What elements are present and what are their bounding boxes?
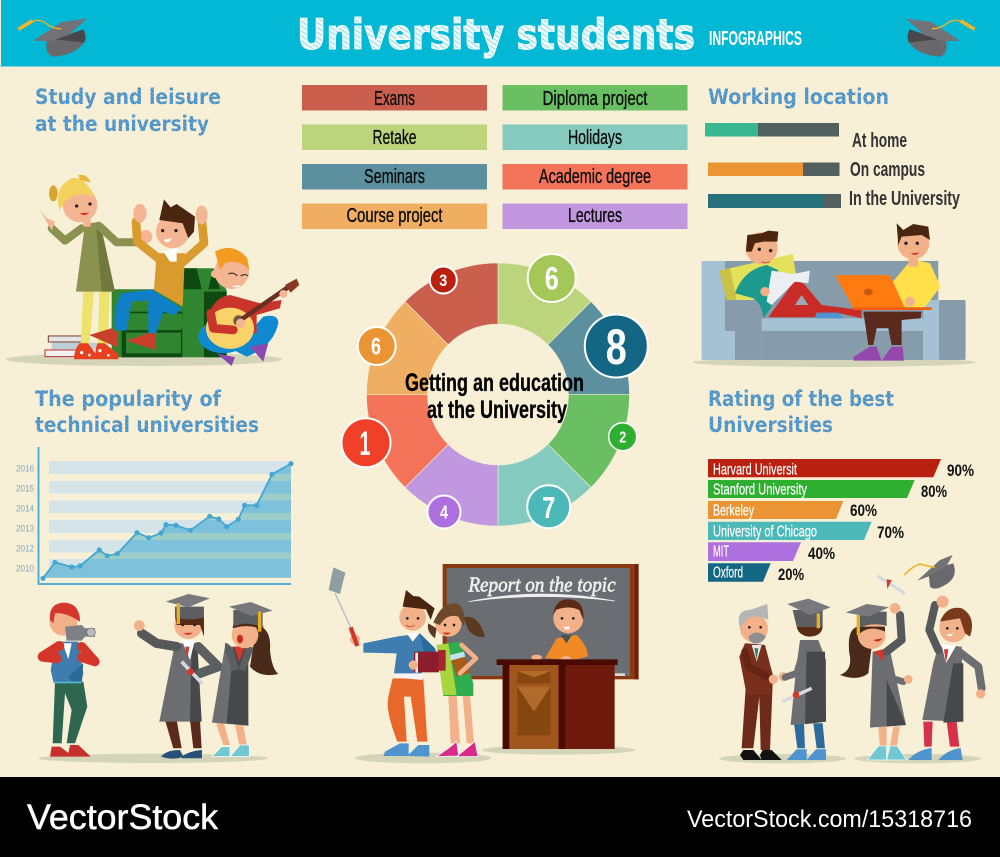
- heading: rating of the best universities: Rating of the best: [708, 387, 894, 411]
- legend item: Exams: Exams: [374, 88, 415, 110]
- student with laptop: [835, 223, 941, 361]
- line chart: popularity by year: 2014: [16, 504, 34, 514]
- photographer: [43, 603, 95, 757]
- line chart: popularity by year: 2013: [16, 524, 34, 534]
- badge 8: [585, 314, 648, 378]
- subtitle: INFOGRAPHICS: [709, 28, 802, 50]
- girl standing: [40, 175, 152, 359]
- legend item: Academic degree: Academic degree: [539, 166, 651, 188]
- badge 6 orange: [358, 327, 396, 365]
- heading: rating of the best universities: Universities: [708, 413, 833, 437]
- line chart: popularity by year: 2015: [16, 484, 34, 494]
- couch: [702, 261, 966, 360]
- legend item: Retake: Retake: [372, 127, 416, 149]
- boy taking selfie: [329, 567, 446, 757]
- bar chart: university ratings: 90%: [947, 461, 974, 480]
- badge 2: 2: [619, 430, 626, 446]
- bar chart: university ratings: Berkeley: [713, 502, 754, 520]
- blackboard: Report on the topic: [467, 573, 616, 597]
- legend item: Seminars: [302, 164, 487, 190]
- bar chart: university ratings: 70%: [877, 523, 904, 542]
- badge 4: 4: [440, 502, 448, 522]
- legend item: Seminars: Seminars: [364, 166, 425, 188]
- illustration: professor and graduates throwing caps: [719, 555, 985, 763]
- donut centre text: at the University: [427, 396, 567, 424]
- badge 6 orange: 6: [371, 334, 381, 360]
- graduate woman waving: [840, 603, 913, 760]
- heading: study and leisure: Study and leisure: [35, 85, 221, 109]
- heading: popularity of technical universities: technical universities: [35, 413, 259, 437]
- badge 2: [609, 423, 637, 451]
- heading: rating of the best universities: [708, 387, 894, 437]
- line chart: popularity by year: [16, 447, 294, 584]
- donut centre text: [405, 369, 584, 424]
- icon: flying cap: [904, 555, 955, 589]
- donut segments: [366, 263, 630, 526]
- legend item: Holidays: [502, 124, 688, 150]
- legend item: Lectures: Lectures: [568, 205, 622, 227]
- badge 6 green: 6: [545, 260, 559, 296]
- girl with books: [428, 603, 485, 757]
- legend item: Academic degree: [502, 164, 688, 190]
- badge 8: 8: [606, 319, 627, 375]
- donut chart: getting an education: [342, 254, 648, 528]
- legend item: Holidays: Holidays: [568, 127, 622, 149]
- chart: working location bars: On campus: [850, 159, 925, 181]
- heading: working location: Working location: [708, 85, 889, 109]
- illustration: photographer and two graduates: [38, 594, 278, 763]
- boy playing guitar: [198, 248, 299, 366]
- bar chart: university ratings: 20%: [778, 565, 804, 584]
- line chart: popularity by year: 2012: [16, 544, 34, 554]
- icon: right graduation cap: [906, 19, 975, 57]
- bar chart: university ratings: Harvard Universit: [713, 462, 797, 478]
- bar chart: university ratings: [708, 459, 974, 584]
- icon: flying diploma: [877, 576, 905, 593]
- legend: eight coloured labels: [302, 85, 688, 229]
- footer: watermark bar: VectorStock.com/15318716: [687, 806, 972, 833]
- sofa: [112, 268, 227, 357]
- bar chart: university ratings: MIT: [713, 544, 729, 560]
- bar chart: university ratings: 60%: [850, 501, 877, 520]
- legend item: Exams: [302, 85, 487, 110]
- blackboard: [443, 564, 639, 679]
- heading: popularity of technical universities: [35, 387, 259, 437]
- badge 1: [342, 418, 390, 467]
- heading: popularity of technical universities: The popularity of: [35, 387, 222, 411]
- chart: working location bars: [705, 123, 961, 210]
- footer: watermark bar: [0, 777, 1000, 857]
- bar chart: university ratings: 40%: [808, 544, 835, 563]
- illustration: two students on a couch: [692, 223, 976, 367]
- line chart: popularity by year: 2010: [16, 564, 34, 574]
- chart: working location bars: In the University: [849, 188, 961, 210]
- bar chart: university ratings: Oxford: [713, 564, 743, 582]
- heading: study and leisure: [35, 85, 221, 136]
- professor: [739, 604, 782, 760]
- legend item: Diploma project: [502, 85, 688, 110]
- badge 7: 7: [542, 490, 555, 525]
- icon: left graduation cap: [18, 19, 87, 57]
- teacher: [531, 599, 588, 663]
- student reading: [719, 231, 862, 318]
- badge 3: 3: [439, 271, 447, 290]
- legend item: Course project: [302, 204, 487, 229]
- heading: study and leisure: at the university: [35, 112, 209, 136]
- line chart: popularity by year: 2016: [16, 464, 34, 474]
- title: University students: [297, 10, 695, 59]
- badge 6 green: [528, 254, 576, 302]
- header banner: [0, 0, 1000, 67]
- illustration: students with guitar on sofa: [6, 175, 299, 366]
- graduate man waving: [908, 596, 985, 760]
- bar chart: university ratings: Stanford University: [713, 482, 807, 498]
- legend item: Retake: [302, 124, 487, 150]
- bar chart: university ratings: University of Chicago: [713, 524, 817, 540]
- icon: stack of books: [45, 336, 97, 357]
- badge 7: [527, 485, 570, 528]
- boy sitting arms raised: [89, 199, 208, 350]
- graduate man: [134, 594, 218, 759]
- bar chart: university ratings: 80%: [921, 482, 947, 501]
- badge 1: 1: [360, 425, 370, 463]
- legend item: Course project: Course project: [346, 205, 443, 227]
- lectern: [497, 659, 618, 749]
- illustration: selfie students and teacher at blackboard: [329, 564, 639, 763]
- legend item: Lectures: [502, 204, 688, 229]
- badge 3: [430, 266, 457, 294]
- footer: watermark bar: VectorStock: [27, 798, 219, 837]
- graduate woman: [212, 602, 278, 757]
- legend item: Diploma project: Diploma project: [542, 88, 648, 110]
- graduate from behind: [779, 599, 831, 760]
- donut centre text: Getting an education: [405, 369, 584, 397]
- badge 4: [428, 496, 460, 528]
- chart: working location bars: At home: [852, 130, 907, 152]
